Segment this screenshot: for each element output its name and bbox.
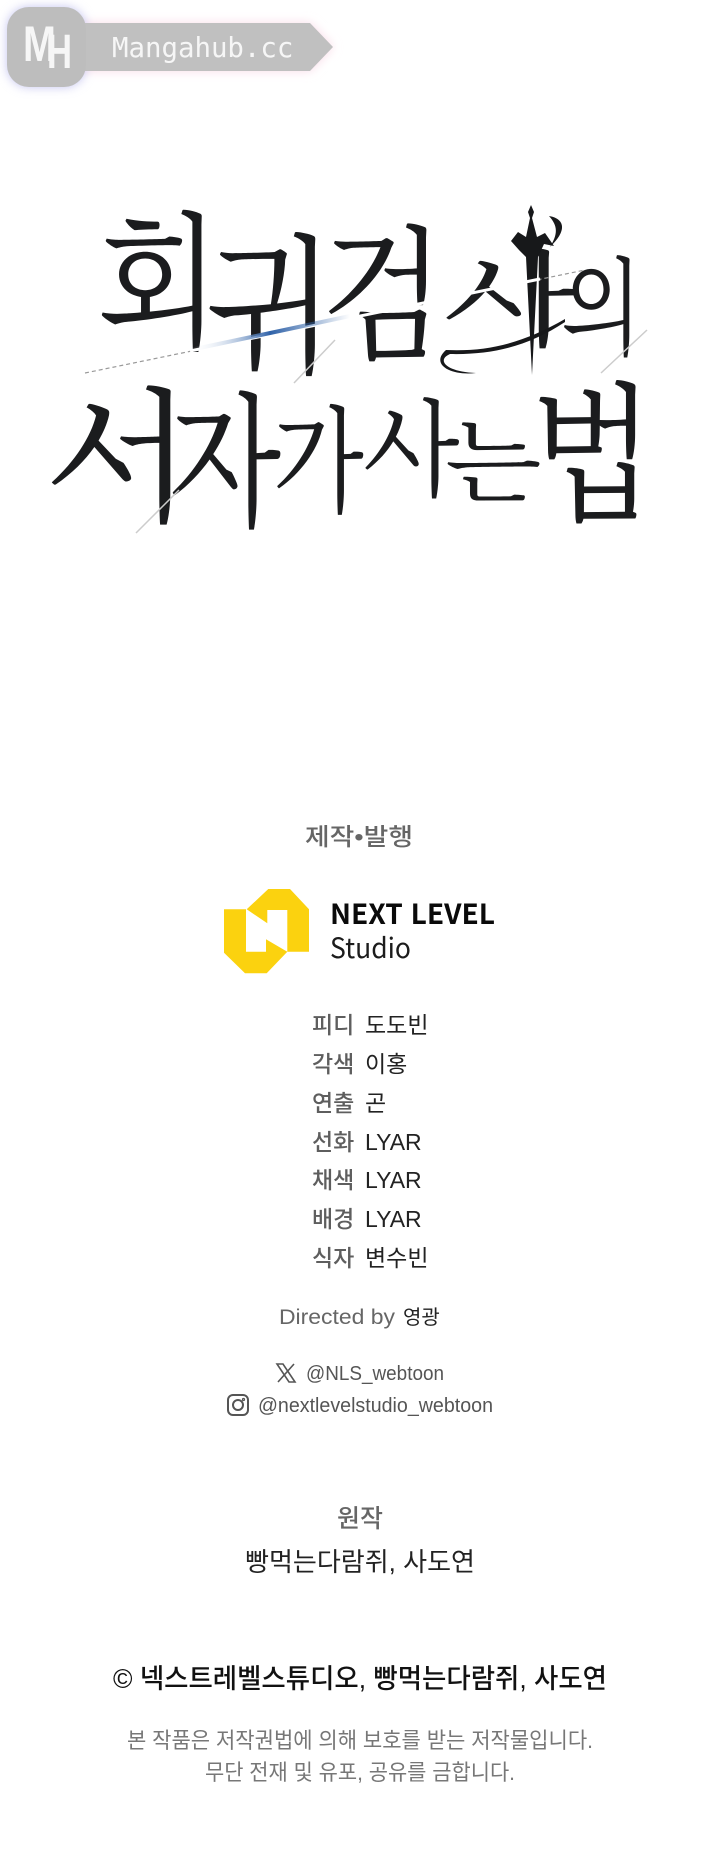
- legal notice: 무단 전재 및 유포, 공유를 금합니다.: [205, 1760, 515, 1785]
- credit: lettering: 식자: [312, 1245, 354, 1271]
- logo: Next Level Studio: NEXT LEVEL: [330, 893, 495, 933]
- logo: Next Level Studio: Studio: [330, 927, 411, 967]
- watermark: Mangahub badge: M: [23, 16, 56, 72]
- title line 2: 서: [44, 342, 194, 551]
- directed by: Directed by: [279, 1306, 396, 1329]
- title line 2: 는: [445, 390, 542, 522]
- credits list: [312, 1012, 428, 1271]
- legal notice: [127, 1728, 593, 1785]
- credit: background: [312, 1206, 422, 1232]
- credit: line art: 선화: [312, 1129, 354, 1155]
- title line 2: 법: [530, 336, 655, 552]
- title logo: [44, 166, 655, 556]
- legal notice: 본 작품은 저작권법에 의해 보호를 받는 저작물입니다.: [127, 1728, 593, 1753]
- credit: director: [312, 1090, 386, 1116]
- directed by: [279, 1306, 440, 1329]
- title line 1: 의: [561, 225, 642, 377]
- title line 2: 사: [363, 367, 460, 518]
- social: Instagram: @nextlevelstudio_webtoon: [258, 1395, 493, 1417]
- directed by: 영광: [403, 1306, 440, 1329]
- title line 1: 귀: [205, 188, 335, 403]
- watermark: Mangahub badge: Mangahub.cc: [112, 33, 293, 64]
- credit: colour: 채색: [312, 1167, 354, 1193]
- title line 1: 검: [321, 181, 446, 389]
- credit: PD: [312, 1012, 428, 1038]
- credit: director: 곤: [365, 1090, 386, 1116]
- credit: writer: 이홍: [365, 1051, 407, 1077]
- social: X: @NLS_webtoon: [306, 1363, 444, 1385]
- credit: line art: [312, 1129, 422, 1155]
- credit: PD: 피디: [312, 1012, 354, 1038]
- original authors: 빵먹는다람쥐, 사도연: [245, 1547, 475, 1577]
- credit: colour: LYAR: [365, 1167, 422, 1193]
- credit: background: LYAR: [365, 1206, 422, 1232]
- credit: lettering: [312, 1245, 428, 1271]
- copyright line: © 넥스트레벨스튜디오, 빵먹는다람쥐, 사도연: [113, 1664, 607, 1694]
- heading: production: 제작•발행: [305, 824, 413, 851]
- title line 1: [97, 166, 642, 403]
- heading: original work: 원작: [337, 1505, 383, 1533]
- credit: lettering: 변수빈: [365, 1245, 428, 1271]
- credit: writer: [312, 1051, 407, 1077]
- credit: line art: LYAR: [365, 1129, 422, 1155]
- credit: background: 배경: [312, 1206, 354, 1232]
- watermark: Mangahub badge: [7, 7, 333, 87]
- icon: sword through title: [511, 205, 562, 375]
- credit: writer: 각색: [312, 1051, 354, 1077]
- swash under title: [440, 319, 565, 373]
- watermark: Mangahub badge: H: [47, 26, 72, 79]
- title line 2: 가: [273, 371, 364, 536]
- title line 1: 회: [97, 166, 221, 379]
- icon: yellow N hexagon: [224, 889, 309, 973]
- title line 2: 자: [169, 347, 281, 556]
- credit: colour: [312, 1167, 422, 1193]
- sword slash across title: [85, 270, 647, 533]
- credit: director: 연출: [312, 1090, 354, 1116]
- title line 2: [44, 336, 655, 556]
- title line 1: 사: [443, 217, 578, 368]
- credit: PD: 도도빈: [365, 1012, 428, 1038]
- logo: Next Level Studio: [224, 889, 495, 973]
- icon: Instagram: [228, 1395, 248, 1415]
- icon: X: [277, 1364, 295, 1382]
